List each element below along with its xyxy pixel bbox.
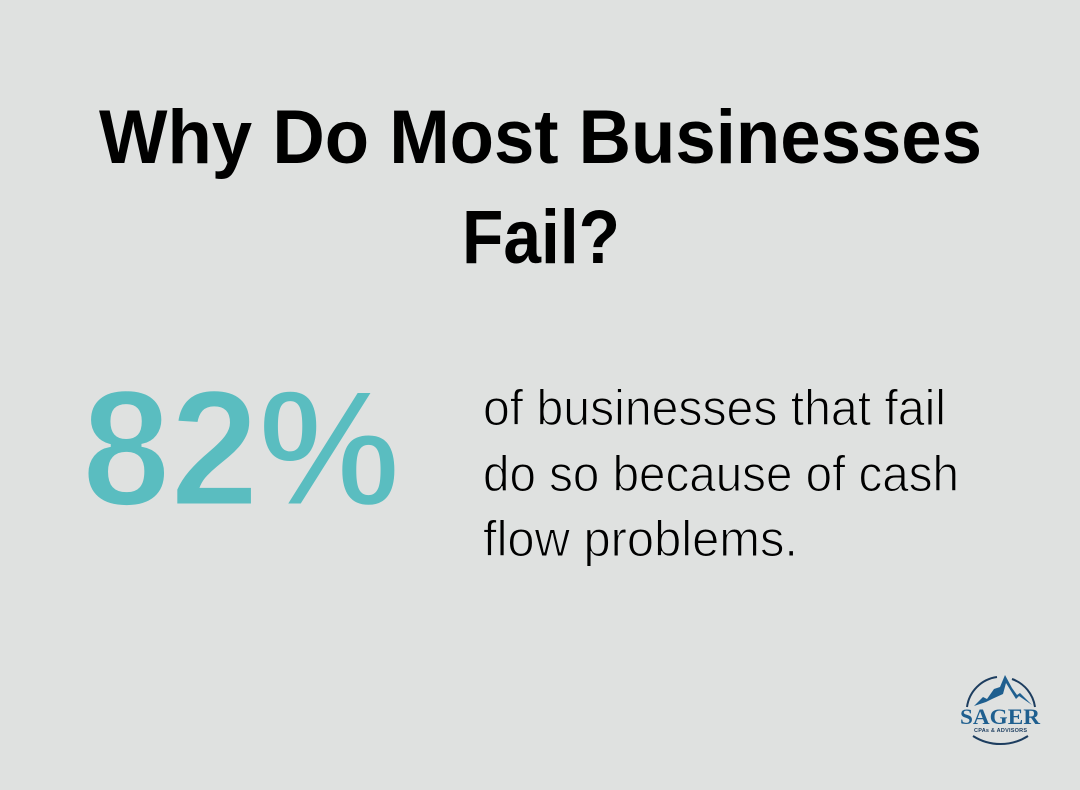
title: Fail? [462,195,620,280]
logo tagline: CPAs & ADVISORS [974,728,1027,734]
logo ring [967,677,1035,744]
statistic description: flow problems. [483,511,798,567]
title [99,95,982,280]
logo: Sager CPAs & Advisors [960,675,1041,744]
logo wordmark: SAGER [960,704,1041,729]
statistic description [483,380,959,567]
statistic description: of businesses that fail [483,380,946,436]
logo mountains [974,675,1032,706]
statistic description: do so because of cash [483,446,959,502]
statistic: 82%: 82% [82,356,400,540]
title: Why Do Most Businesses [99,95,982,180]
